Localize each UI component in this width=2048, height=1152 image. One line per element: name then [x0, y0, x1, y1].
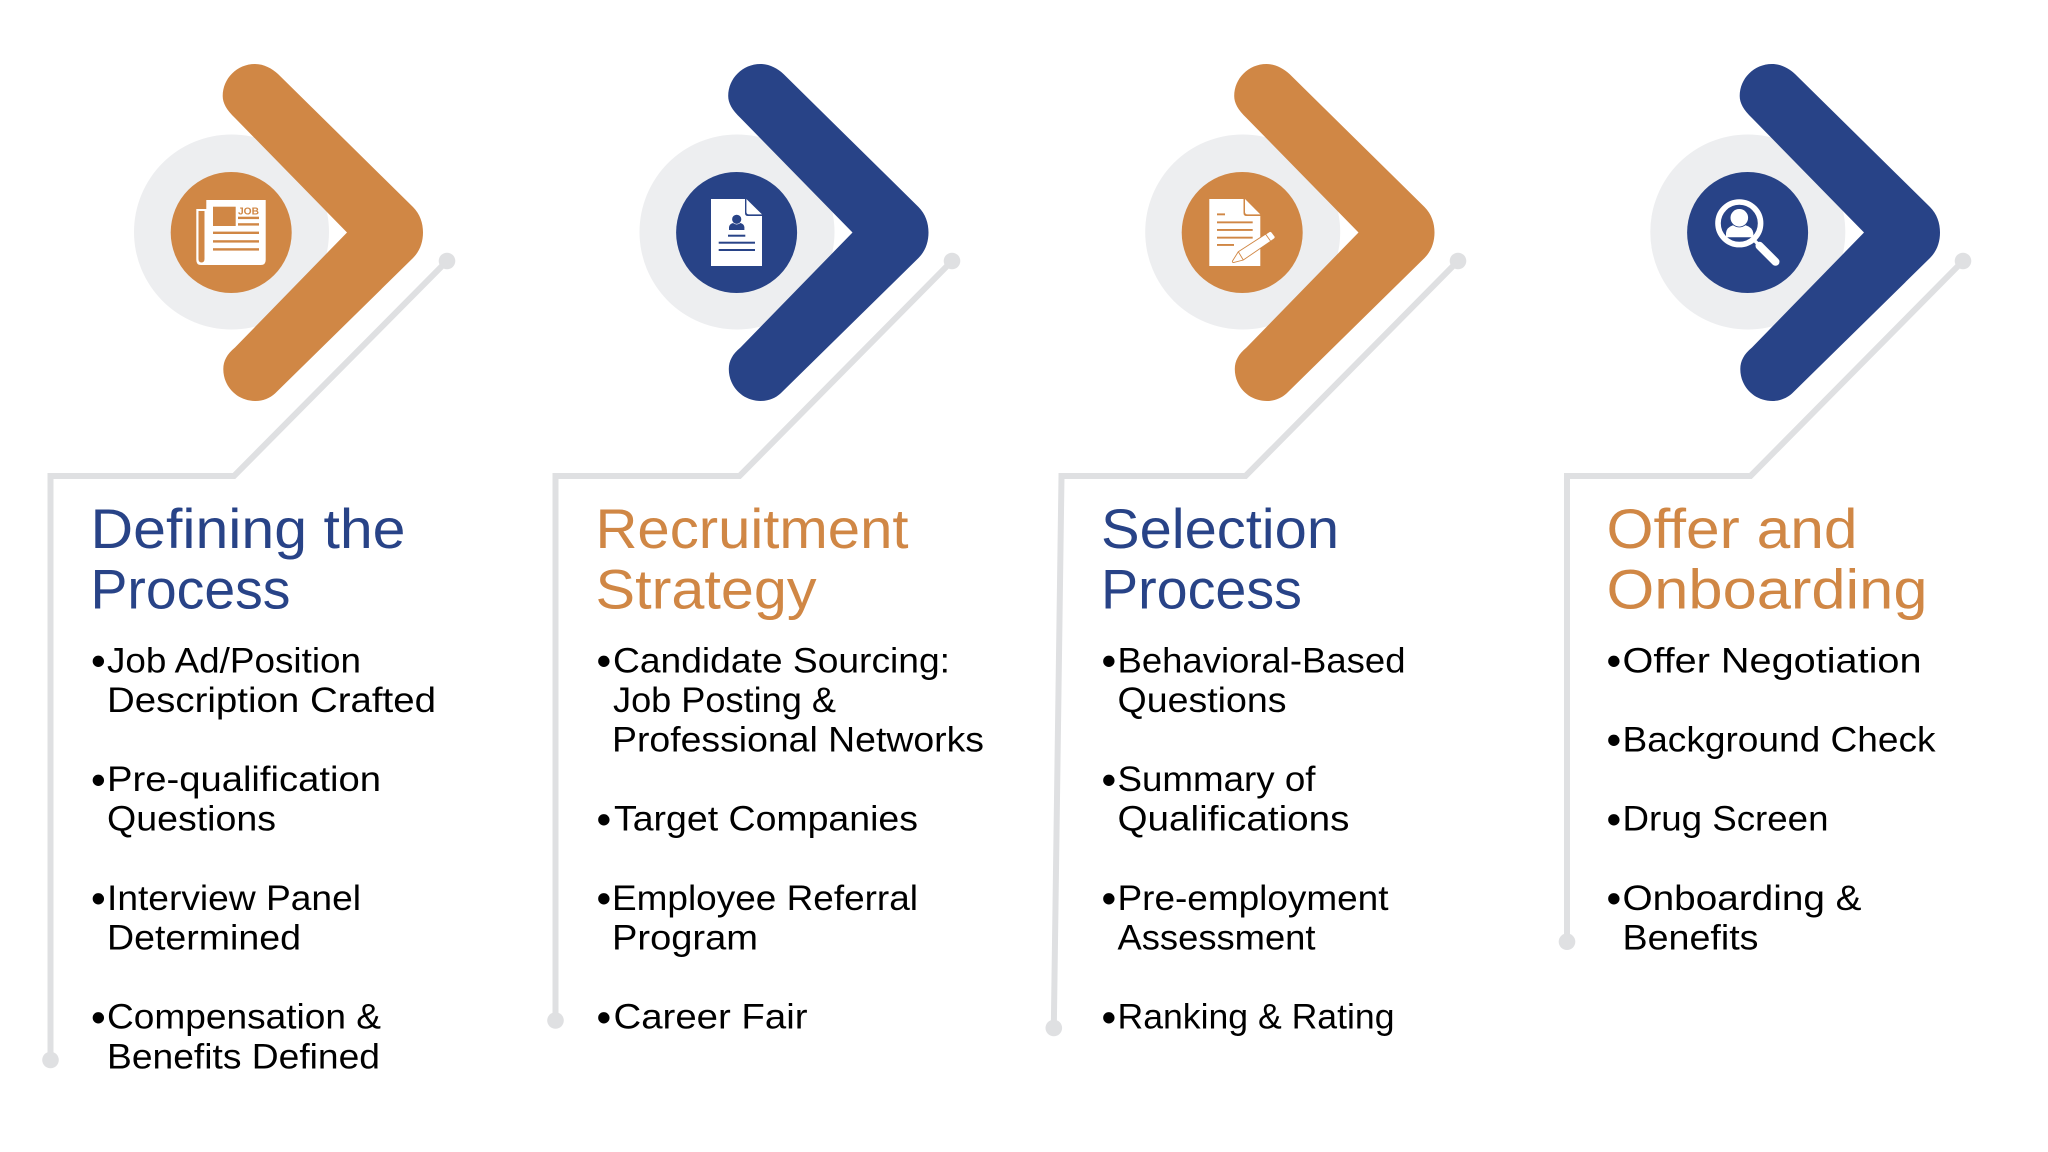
bullet list: step 1: Compensation & — [107, 998, 381, 1037]
bullet list: step 4: Background Check — [1622, 720, 1936, 760]
panel: defining the process — [42, 64, 455, 1076]
bullet list: step 3: • — [1102, 993, 1116, 1040]
heading: defining the process — [90, 497, 406, 620]
chevron arrow: orange — [223, 64, 423, 401]
bullet list: step 4: • — [1606, 637, 1621, 684]
icon: magnifier over person — [1687, 172, 1808, 293]
bullet list: step 3: Pre-employment — [1118, 879, 1389, 918]
bullet list: step 2: • — [596, 993, 611, 1040]
bullet list: step 3: Qualifications — [1118, 800, 1350, 839]
bullet list: step 3: Questions — [1118, 681, 1286, 720]
connector line: step 4 — [1559, 253, 1971, 950]
panel: recruitment strategy — [547, 64, 984, 1040]
connector line: step 2 — [547, 253, 960, 1029]
bullet list: step 3: Summary of — [1118, 760, 1316, 799]
chevron arrow: orange — [1234, 64, 1434, 401]
chevron arrow: blue — [728, 64, 928, 401]
bullet list: step 1: • — [91, 756, 106, 803]
bullet list: step 2: Program — [612, 918, 758, 958]
icon backdrop: gray circle — [134, 134, 329, 330]
bullet list: step 1: Job Ad/Position — [107, 641, 361, 680]
panel: offer and onboarding — [1559, 64, 1971, 958]
heading: recruitment strategy: Recruitment — [596, 497, 909, 560]
bullet list: step 1: Benefits Defined — [107, 1037, 380, 1076]
icon backdrop: gray circle — [640, 134, 834, 330]
bullet list: step 1: Determined — [107, 918, 301, 958]
icon: newspaper job ad: JOB — [238, 206, 259, 218]
bullet list: step 3: Behavioral-Based — [1118, 641, 1406, 680]
bullet list: step 4 — [1606, 637, 1936, 958]
bullet list: step 3: Ranking & Rating — [1118, 998, 1394, 1037]
bullet list: step 3: • — [1102, 637, 1116, 684]
icon backdrop: gray circle — [1650, 134, 1845, 330]
heading: selection process — [1101, 497, 1339, 620]
icon backdrop: gray circle — [1145, 134, 1340, 330]
bullet list: step 2: • — [596, 637, 611, 684]
heading: recruitment strategy: Strategy — [596, 558, 816, 620]
bullet list: step 4: • — [1606, 875, 1621, 922]
bullet list: step 4: Benefits — [1622, 918, 1758, 958]
connector line: step 3 — [1046, 253, 1466, 1036]
heading: selection process: Selection — [1101, 497, 1339, 560]
bullet list: step 1: Pre-qualification — [107, 760, 381, 799]
bullet list: step 1: Interview Panel — [107, 879, 361, 918]
heading: defining the process: Defining the — [90, 497, 406, 560]
bullet list: step 2: Career Fair — [614, 998, 808, 1037]
heading: offer and onboarding — [1606, 497, 1928, 620]
heading: recruitment strategy — [596, 497, 909, 620]
heading: selection process: Process — [1101, 558, 1302, 620]
bullet list: step 2: • — [596, 875, 611, 922]
bullet list: step 1: Description Crafted — [107, 681, 436, 720]
bullet list: step 1: • — [91, 993, 106, 1040]
heading: offer and onboarding: Onboarding — [1606, 558, 1928, 620]
bullet list: step 4: • — [1606, 795, 1621, 842]
bullet list: step 2: Target Companies — [614, 800, 918, 839]
heading: offer and onboarding: Offer and — [1606, 497, 1858, 560]
bullet list: step 1: Questions — [107, 800, 276, 839]
bullet list: step 1: • — [91, 637, 106, 684]
bullet list: step 4: Offer Negotiation — [1622, 641, 1922, 680]
bullet list: step 1: • — [91, 875, 106, 922]
connector line: step 1 — [42, 253, 455, 1068]
bullet list: step 4: Drug Screen — [1622, 800, 1828, 839]
bullet list: step 3 — [1102, 637, 1406, 1040]
panel: selection process — [1046, 64, 1466, 1040]
icon: document and pencil — [1182, 172, 1303, 293]
bullet list: step 2: Professional Networks — [612, 720, 984, 760]
bullet list: step 3: Assessment — [1118, 918, 1316, 958]
bullet list: step 2: • — [596, 795, 611, 842]
icon: candidate resume — [676, 172, 797, 293]
bullet list: step 3: • — [1102, 756, 1116, 803]
bullet list: step 3: • — [1102, 875, 1116, 922]
bullet list: step 4: • — [1606, 716, 1621, 763]
bullet list: step 2 — [596, 637, 984, 1040]
icon: newspaper job ad — [171, 172, 292, 293]
bullet list: step 2: Employee Referral — [612, 879, 918, 918]
bullet list: step 2: Job Posting & — [613, 681, 836, 720]
bullet list: step 4: Onboarding & — [1622, 879, 1862, 918]
bullet list: step 2: Candidate Sourcing: — [613, 641, 950, 680]
chevron arrow: blue — [1740, 64, 1940, 401]
bullet list: step 1 — [91, 637, 436, 1076]
heading: defining the process: Process — [90, 558, 290, 620]
